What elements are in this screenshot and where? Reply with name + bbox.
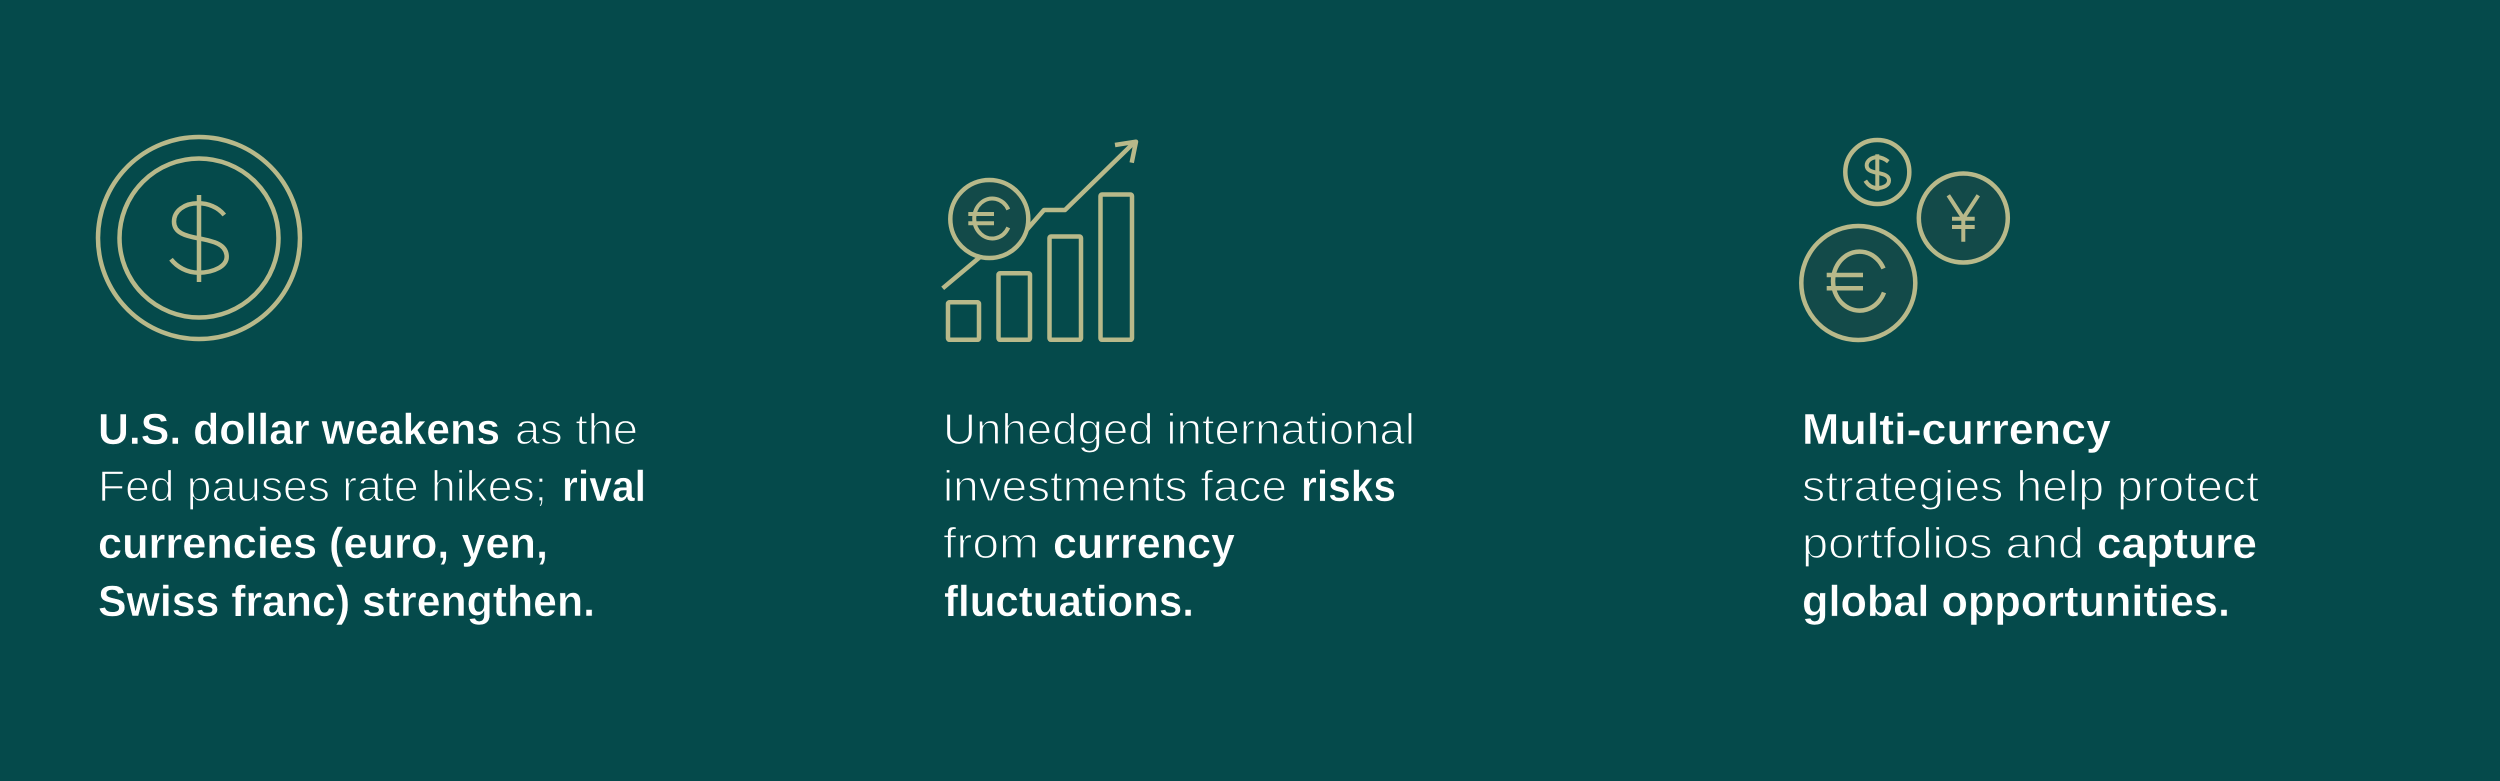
panel: unhedged investment risks xyxy=(943,142,1427,626)
icon: rising bar chart with euro coin xyxy=(943,142,1136,340)
text block: dollar weakens: Swiss franc) strengthen. xyxy=(98,577,595,626)
icon: dollar coin xyxy=(98,137,300,339)
icon: dollar, yen and euro coins xyxy=(1801,140,2008,340)
text block: multi-currency strategies: global opportunities. xyxy=(1802,577,2230,626)
text block: multi-currency strategies: capture xyxy=(2097,519,2257,568)
text block: multi-currency strategies: strategies help protect xyxy=(1802,462,2259,511)
text block: unhedged risks: fluctuations. xyxy=(944,577,1194,626)
text block: dollar weakens: as the xyxy=(515,405,638,454)
text block: unhedged risks: investments face xyxy=(943,462,1287,511)
text block: dollar weakens: rival xyxy=(562,462,646,511)
panel: multi-currency strategies xyxy=(1801,140,2271,626)
panel: U.S. dollar weakens xyxy=(98,137,658,626)
text block: unhedged risks: from xyxy=(943,519,1039,568)
text block: unhedged risks: Unhedged international xyxy=(943,405,1415,454)
text block: dollar weakens: currencies (euro, yen, xyxy=(98,519,548,568)
text block: unhedged risks: currency xyxy=(1053,519,1236,568)
text block: dollar weakens: U.S. dollar weakens xyxy=(98,405,500,454)
text block: multi-currency strategies: Multi-currency xyxy=(1802,405,2112,454)
text block: multi-currency strategies: portfolios and xyxy=(1802,519,2084,568)
text block: dollar weakens: Fed pauses rate hikes; xyxy=(98,462,547,511)
text block: unhedged risks: risks xyxy=(1301,462,1396,511)
